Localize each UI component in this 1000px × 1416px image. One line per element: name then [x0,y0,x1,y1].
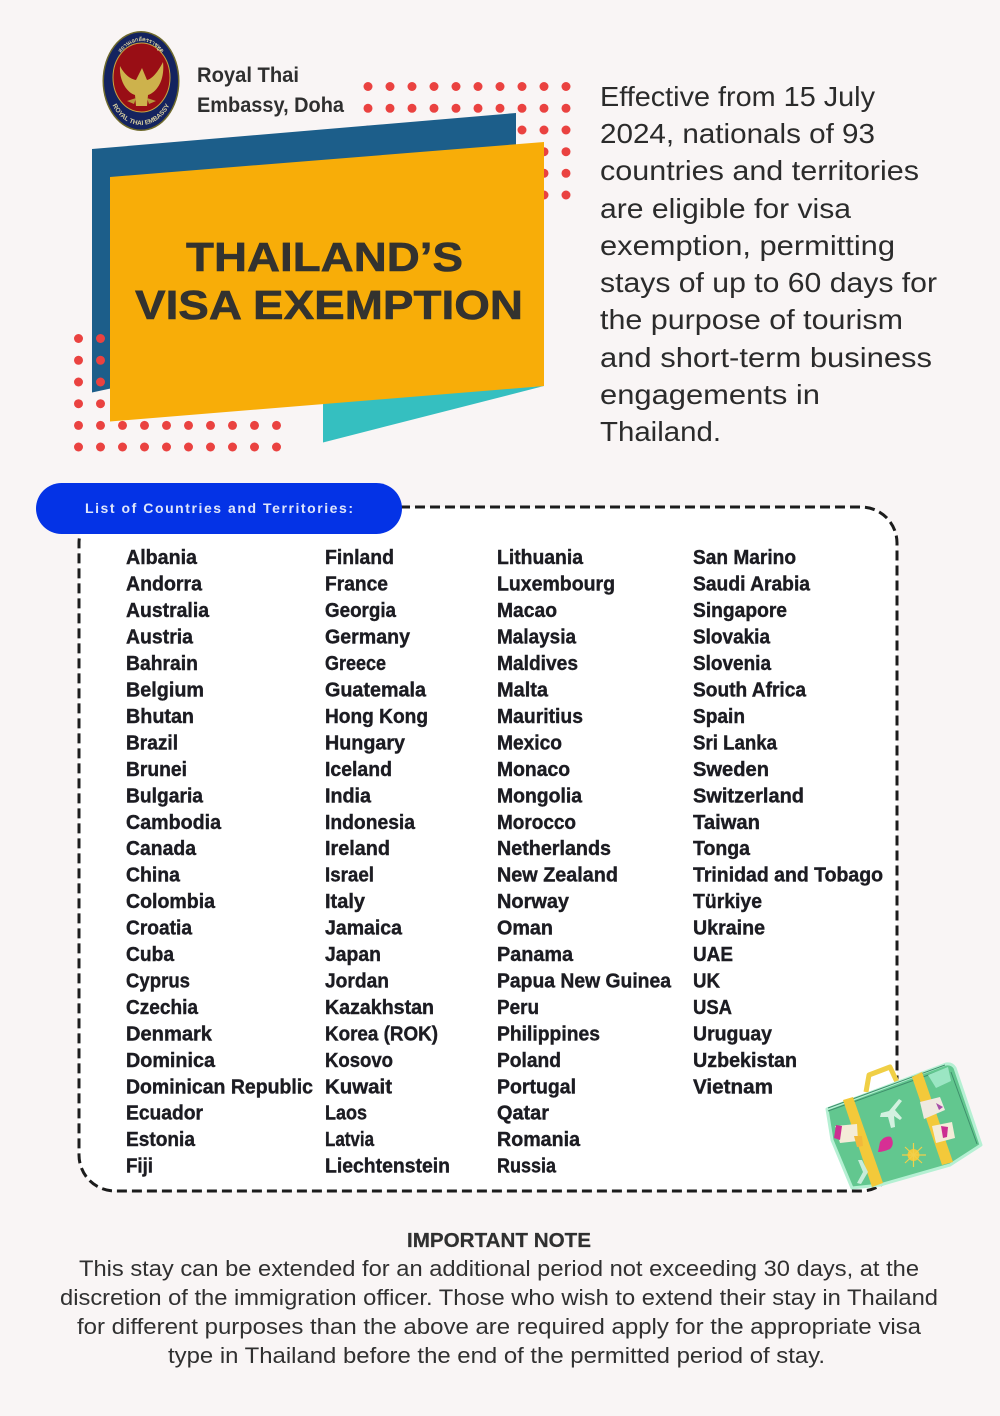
suitcase body [827,1064,981,1188]
country column 4: Taiwan [693,812,760,834]
icon: heart [878,1137,893,1152]
intro paragraph: are eligible for visa [600,193,851,224]
country column 3: Russia [497,1156,557,1178]
country column 1: Canada [126,838,197,860]
country column 3: Mongolia [497,786,583,808]
country column 2: Hong Kong [325,706,428,728]
country column 1: Bhutan [126,706,194,728]
note heading: IMPORTANT NOTE [407,1230,591,1252]
country column 4 [693,547,883,1098]
country column 1: Brunei [126,759,187,781]
country column 2: Latvia [325,1129,375,1151]
country column 2: Laos [325,1102,367,1124]
logo: Royal Thai Embassy emblem: สถานเอกอัครราชทูต [118,36,164,52]
country column 3: Poland [497,1050,561,1072]
country column 3: Macao [497,600,557,622]
sticker: upper right [920,1097,945,1119]
embassy name: Royal Thai [197,64,299,87]
country column 4: Slovenia [693,653,772,675]
country column 4: Sri Lanka [693,732,778,754]
country column 4: Spain [693,706,745,728]
country column 2: Israel [325,864,374,886]
country column 1: Albania [126,547,198,569]
country column 2: India [325,786,372,808]
country column 2: Germany [325,626,411,648]
country column 2: Korea (ROK) [325,1024,438,1046]
country column 2: Liechtenstein [325,1156,450,1178]
logo: Royal Thai Embassy emblem [102,31,180,131]
country column 1: Estonia [126,1129,196,1151]
country column 2 [325,547,450,1178]
country column 1: Cuba [126,944,175,966]
country column 1 [126,547,313,1178]
country column 1: Austria [126,626,194,648]
country column 3: Peru [497,997,539,1019]
country column 2: Greece [325,653,386,675]
title [135,234,523,328]
country column 2: Jordan [325,970,389,992]
sticker: lower right [932,1122,955,1143]
country column 3: Philippines [497,1024,600,1046]
country column 2: Iceland [325,759,392,781]
icon: garuda [120,62,163,106]
country column 2: Italy [325,891,366,913]
country column 3: Romania [497,1129,581,1151]
country column 1: Andorra [126,574,203,596]
icon: plane [880,1099,902,1128]
country column 1: Dominica [126,1050,216,1072]
intro paragraph: 2024, nationals of 93 [600,118,875,149]
intro paragraph: Thailand. [600,416,721,447]
country column 2: Japan [325,944,381,966]
country column 1: Fiji [126,1156,153,1178]
country column 4: UK [693,970,721,992]
important note [60,1230,938,1368]
banner: orange title panel [110,142,544,422]
country column 4: Slovakia [693,626,771,648]
country column 3: Monaco [497,759,570,781]
country column 4: South Africa [693,680,807,702]
intro paragraph: exemption, permitting [600,230,895,261]
country column 3: Mexico [497,732,562,754]
country column 1: Cambodia [126,812,222,834]
country column 4: Trinidad and Tobago [693,864,883,886]
intro paragraph: engagements in [600,379,820,410]
country column 2: Jamaica [325,918,403,940]
country column 3: Netherlands [497,838,611,860]
country column 1: Denmark [126,1024,213,1046]
country column 1: Dominican Republic [126,1076,313,1098]
country column 4: USA [693,997,732,1019]
country column 2: Kosovo [325,1050,393,1072]
country column 1: China [126,864,181,886]
country column 3: Papua New Guinea [497,970,672,992]
banner: blue back shape [92,113,516,392]
country column 3: Morocco [497,812,576,834]
country column 3: Maldives [497,653,578,675]
country column 3: Qatar [497,1102,549,1124]
country column 4: Uruguay [693,1024,773,1046]
country column 2: Indonesia [325,812,416,834]
country column 2: France [325,574,388,596]
country column 1: Croatia [126,918,193,940]
intro paragraph: and short-term business [600,342,932,373]
embassy name: Embassy, Doha [197,94,344,117]
logo: Royal Thai Embassy emblem: ROYAL THAI EMBASSY [112,103,169,126]
country column 2: Kazakhstan [325,997,434,1019]
country column 4: Switzerland [693,786,804,808]
icon: sun [902,1143,926,1167]
country column 1: Belgium [126,680,204,702]
country column 3 [497,547,672,1178]
country column 1: Ecuador [126,1102,203,1124]
intro paragraph: countries and territories [600,155,919,186]
country column 1: Colombia [126,891,216,913]
country column 1: Bahrain [126,653,198,675]
country column 4: Türkiye [693,891,762,913]
country column 3: Portugal [497,1076,576,1098]
country column 4: Singapore [693,600,787,622]
country column 3: Oman [497,918,553,940]
country column 3: Malaysia [497,626,577,648]
country column 3: Malta [497,680,549,702]
embassy name [197,64,344,117]
note body: This stay can be extended for an additional period not exceeding 30 days, at the [79,1256,919,1281]
intro paragraph: the purpose of tourism [600,304,903,335]
country column 3: Panama [497,944,574,966]
country column 2: Hungary [325,732,406,754]
country column 1: Brazil [126,732,178,754]
intro paragraph [600,81,937,447]
country column 2: Ireland [325,838,390,860]
country column 1: Bulgaria [126,786,204,808]
dot pattern: bottom left [74,334,281,452]
country column 2: Finland [325,547,394,569]
note body: for different purposes than the above are required apply for the appropriate visa [77,1314,922,1339]
intro paragraph: Effective from 15 July [600,81,875,112]
suitcase straps [843,1072,953,1187]
banner: teal ribbon [323,386,544,442]
sticker: left [835,1124,858,1143]
country column 4: Ukraine [693,918,765,940]
icon: suitcase [827,1064,981,1188]
title: VISA EXEMPTION [135,282,523,328]
note body: type in Thailand before the end of the permitted period of stay. [168,1343,825,1368]
country column 3: Lithuania [497,547,584,569]
country column 3: Mauritius [497,706,583,728]
panel: countries list frame [79,507,897,1191]
country column 3: Luxembourg [497,574,615,596]
country column 4: Tonga [693,838,751,860]
country column 3: New Zealand [497,864,618,886]
country column 2: Georgia [325,600,397,622]
list heading pill [36,483,402,534]
note body: discretion of the immigration officer. Those who wish to extend their stay in Thailand [60,1285,938,1310]
intro paragraph: stays of up to 60 days for [600,267,937,298]
country column 4: Vietnam [693,1076,773,1098]
country column 2: Kuwait [325,1076,392,1098]
country column 1: Australia [126,600,210,622]
country column 4: Uzbekistan [693,1050,797,1072]
country column 1: Czechia [126,997,199,1019]
list heading pill: List of Countries and Territories: [85,500,353,516]
dot pattern: top right [364,82,570,200]
country column 4: San Marino [693,547,796,569]
country column 1: Cyprus [126,970,190,992]
suitcase handle [866,1067,897,1092]
country column 4: Saudi Arabia [693,574,811,596]
icon: plane small [857,1160,868,1184]
country column 3: Norway [497,891,570,913]
note body [60,1256,938,1368]
country column 4: Sweden [693,759,769,781]
country column 4: UAE [693,944,733,966]
country column 2: Guatemala [325,680,427,702]
title: THAILAND’S [186,234,463,280]
